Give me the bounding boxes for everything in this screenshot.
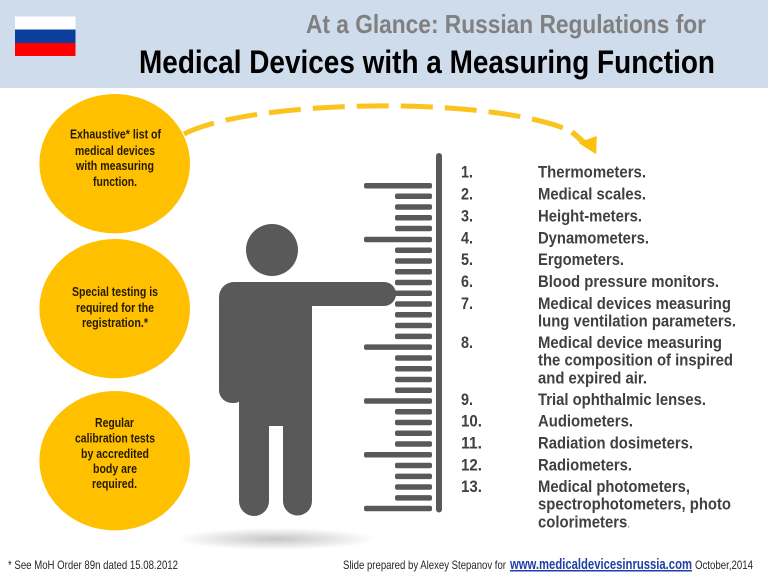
numbered list of devices: 7. [461,294,473,313]
numbered list of devices: Radiation dosimeters. [538,434,693,452]
circle: special testing: required for the [76,301,154,315]
ruler [364,153,442,512]
numbered list of devices: Medical scales. [538,184,646,204]
numbered list of devices: 6. [461,272,473,291]
numbered list of devices: and expired air. [538,368,647,388]
credit line: Slide prepared by Alexey Stepanov for [343,558,506,572]
numbered list of devices: Radiometers. [538,456,632,474]
circle: calibration tests [39,391,190,530]
circle: exhaustive list: with measuring [75,159,154,173]
floor shadow [176,528,376,550]
numbered list of devices: spectrophotometers, photo [538,494,731,514]
numbered list of devices: 1. [461,162,473,182]
circle: exhaustive list: function. [93,175,137,189]
footnote: * See MoH Order 89n dated 15.08.2012 [8,558,178,572]
numbered list of devices: 8. [461,333,473,352]
circle: calibration tests: by accredited [81,447,149,461]
numbered list of devices: colorimeters. [538,512,630,532]
numbered list of devices: 2. [461,184,473,204]
numbered list of devices: 11. [461,434,482,452]
circle: special testing [39,239,190,378]
numbered list of devices: 13. [461,477,482,496]
circle: special testing: Special testing is [72,285,158,299]
circle: calibration tests: body are [93,462,137,476]
numbered list of devices: Audiometers. [538,412,633,430]
circle: exhaustive list [39,94,190,233]
numbered list of devices: 12. [461,456,482,474]
credit line: www.medicaldevicesinrussia.com [509,556,692,573]
circle: calibration tests: calibration tests [75,432,155,446]
title: subtitle line: At a Glance: Russian Regulations for [306,9,706,39]
circle: exhaustive list: medical devices [75,144,155,158]
circle: special testing: registration.* [82,316,148,330]
credit line [343,556,753,573]
numbered list of devices: Medical devices measuring [538,294,731,313]
icon: person [219,224,396,516]
numbered list of devices: lung ventilation parameters. [538,312,736,330]
numbered list of devices: Ergometers. [538,250,624,269]
numbered list of devices: 9. [461,390,473,409]
numbered list of devices: Dynamometers. [538,228,649,248]
header band [0,0,768,88]
numbered list of devices: 5. [461,250,473,269]
numbered list of devices: Medical photometers, [538,477,690,496]
numbered list of devices: the composition of inspired [538,350,733,370]
numbered list of devices: Trial ophthalmic lenses. [538,390,706,409]
numbered list of devices: 10. [461,412,482,430]
icon: Russian flag [15,16,76,56]
numbered list of devices [461,162,736,532]
numbered list of devices: Thermometers. [538,162,646,182]
circle: calibration tests: Regular [95,416,134,430]
credit line: October,2014 [695,558,753,572]
numbered list of devices: 3. [461,206,473,226]
numbered list of devices: Height-meters. [538,206,642,226]
circle: exhaustive list: Exhaustive* list of [70,128,162,142]
arrow: dashed curve from first circle to list [184,106,596,153]
numbered list of devices: Medical device measuring [538,333,722,352]
numbered list of devices: Blood pressure monitors. [538,272,719,291]
numbered list of devices: 4. [461,228,473,248]
circle: calibration tests: required. [92,477,137,491]
